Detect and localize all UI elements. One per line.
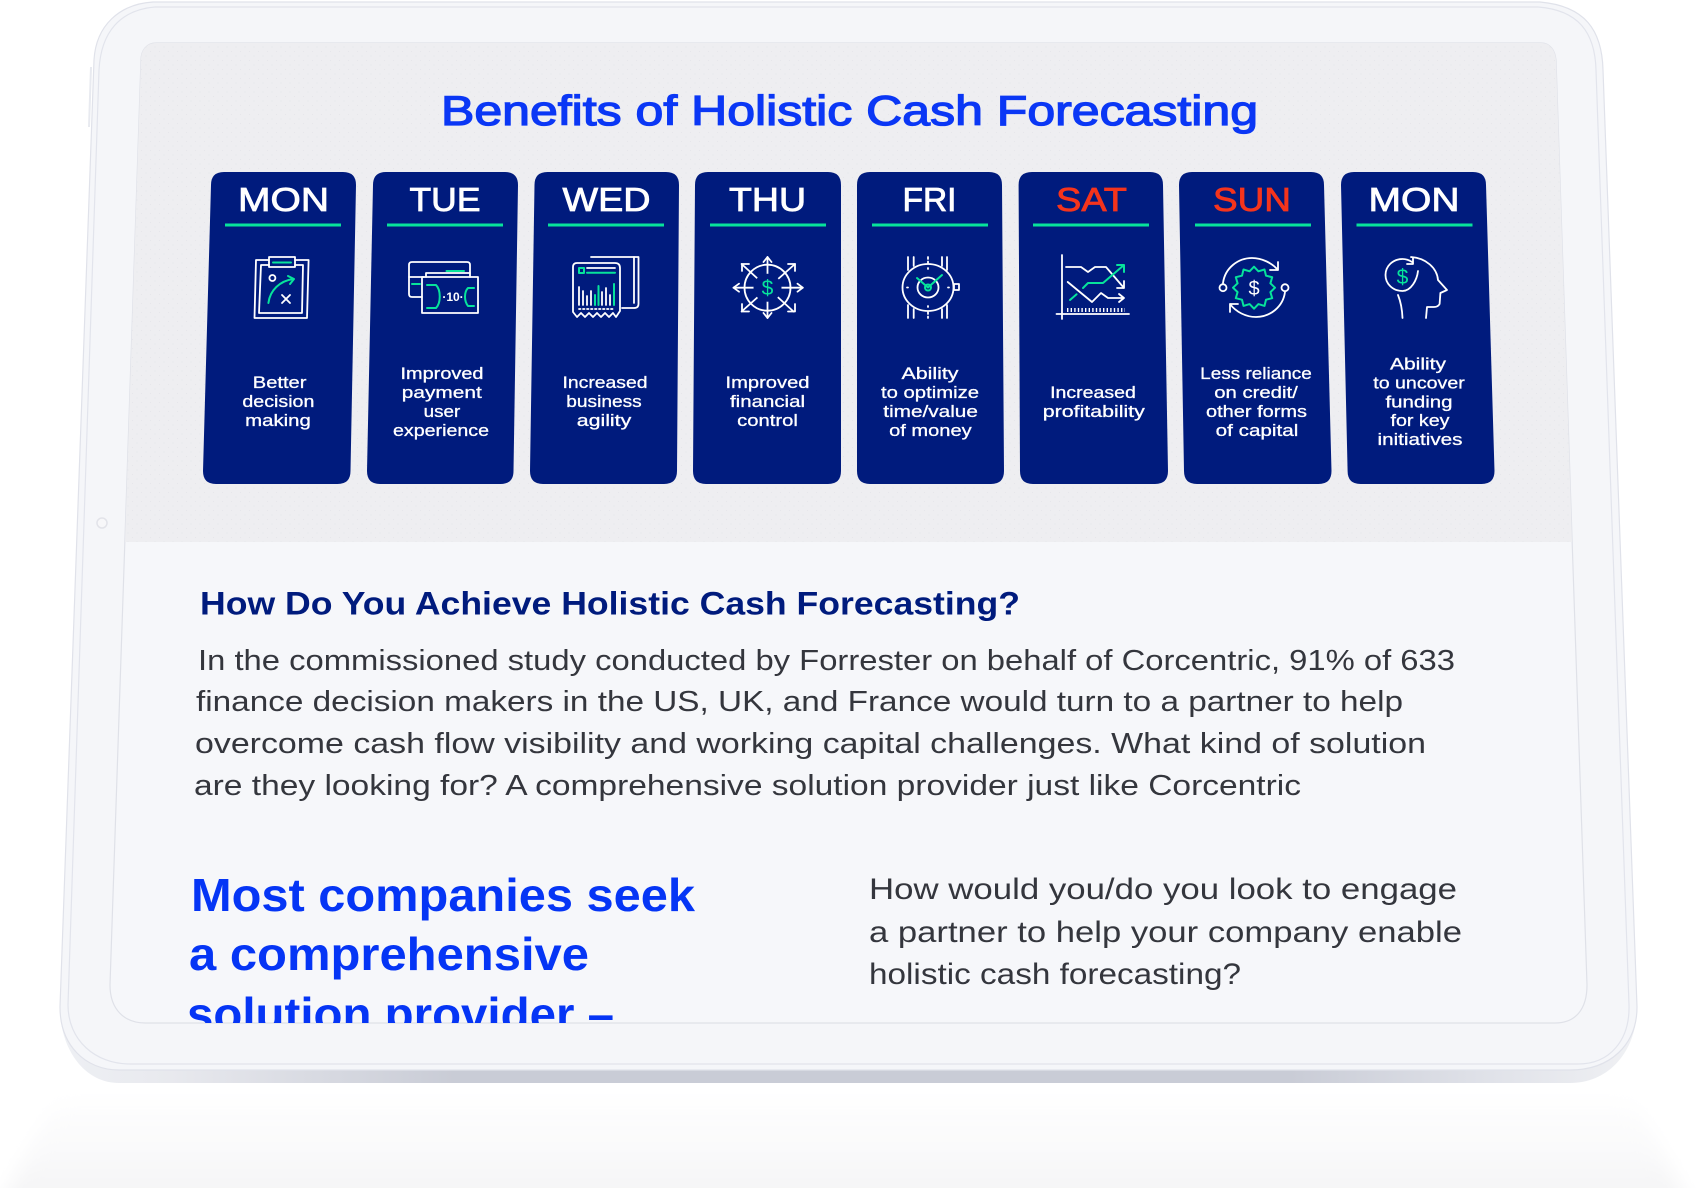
- description: business: [566, 392, 642, 411]
- icon: head with dollar: $: [1397, 266, 1409, 289]
- body paragraph: are they looking for? A comprehensive solution provider just like Corcentric: [194, 770, 1301, 802]
- description: Increased: [562, 373, 648, 392]
- survey question: [869, 873, 1462, 991]
- card: Wednesday, increased business agility: [530, 172, 679, 484]
- description: Increased: [1050, 383, 1136, 402]
- day label: TUE: [410, 181, 480, 218]
- icon: payment cards with banknote: [409, 262, 478, 313]
- description: profitability: [1043, 402, 1145, 421]
- description: payment: [402, 383, 482, 402]
- body paragraph: finance decision makers in the US, UK, and France would turn to a partner to help: [196, 686, 1403, 718]
- icon: dollar with radiating arrows: $: [762, 277, 774, 300]
- description: on credit/: [1214, 383, 1298, 402]
- description: of capital: [1216, 421, 1298, 440]
- card: Thursday, improved financial control: [693, 172, 841, 484]
- day label: MON: [238, 181, 329, 218]
- description: agility: [577, 411, 632, 430]
- card: Friday, optimize time/value of money: [857, 172, 1004, 484]
- description: [1373, 354, 1465, 449]
- description: decision: [242, 392, 314, 411]
- survey question: holistic cash forecasting?: [869, 958, 1241, 991]
- day label: SUN: [1213, 181, 1291, 218]
- description: of money: [889, 421, 972, 440]
- description: financial: [730, 392, 805, 411]
- icon: financial report receipt: [573, 257, 638, 317]
- description: [562, 373, 648, 430]
- callout: most companies seek a comprehensive solution provider: [190, 878, 695, 1023]
- rule: [1356, 224, 1472, 226]
- rule: [1033, 224, 1149, 226]
- icon: payment cards with banknote: ·10·: [442, 290, 464, 304]
- icon: circular dollar gear: [1220, 258, 1288, 317]
- rule: [1195, 224, 1311, 226]
- description: [393, 364, 489, 440]
- description: [1043, 383, 1145, 421]
- rule: [548, 224, 664, 226]
- icon: dollar with radiating arrows: [734, 257, 803, 318]
- side button: [89, 67, 91, 127]
- title: Benefits of Holistic Cash Forecasting: [441, 87, 1258, 134]
- description: user: [424, 402, 461, 421]
- description: for key: [1390, 411, 1450, 430]
- callout: most companies seek a comprehensive solution provider: Most companies seek: [191, 869, 695, 921]
- description: [726, 373, 810, 430]
- camera: [97, 518, 107, 528]
- description: Ability: [902, 364, 959, 383]
- icon: wristwatch: [902, 257, 959, 318]
- description: [881, 364, 979, 440]
- day label: FRI: [902, 181, 956, 218]
- body paragraph: [194, 645, 1455, 802]
- description: making: [245, 411, 311, 430]
- icon: head with dollar: [1386, 257, 1447, 318]
- description: Ability: [1390, 354, 1447, 374]
- description: Improved: [400, 364, 484, 383]
- icon: profit line chart: [1056, 255, 1129, 319]
- description: Improved: [726, 373, 810, 392]
- screen lower background: [110, 43, 1587, 1023]
- description: Less reliance: [1200, 364, 1312, 383]
- description: initiatives: [1378, 430, 1462, 449]
- rule: [387, 224, 503, 226]
- icon: clipboard play: [254, 257, 309, 318]
- description: Better: [253, 373, 307, 392]
- icon: circular dollar gear: $: [1248, 278, 1260, 300]
- description: other forms: [1206, 402, 1307, 421]
- description: to optimize: [881, 383, 979, 402]
- description: time/value: [883, 402, 978, 421]
- day label: MON: [1368, 181, 1460, 218]
- ground shadow: [21, 1176, 1669, 1188]
- rule: [872, 224, 988, 226]
- description: [1200, 364, 1312, 440]
- description: experience: [393, 421, 489, 440]
- card: Sunday, less reliance on credit: [1179, 172, 1332, 484]
- description: to uncover: [1373, 374, 1465, 392]
- screen: [110, 43, 1587, 1023]
- body paragraph: overcome cash flow visibility and working capital challenges. What kind of solution: [195, 728, 1426, 760]
- callout: most companies seek a comprehensive solution provider: a comprehensive: [189, 928, 589, 980]
- survey question: How would you/do you look to engage: [869, 873, 1457, 906]
- day label: WED: [562, 181, 650, 218]
- callout: most companies seek a comprehensive solution provider: solution provider –: [187, 988, 614, 1040]
- day label: THU: [729, 181, 806, 218]
- body paragraph: In the commissioned study conducted by Forrester on behalf of Corcentric, 91% of 633: [198, 645, 1455, 677]
- screen upper grey panel: [125, 43, 1572, 542]
- survey question: a partner to help your company enable: [869, 916, 1462, 949]
- description: control: [737, 411, 798, 430]
- card: Monday, uncover funding: [1341, 172, 1494, 484]
- card: Saturday, increased profitability: [1019, 172, 1168, 484]
- description: funding: [1386, 392, 1452, 412]
- rule: [710, 224, 826, 226]
- rule: [225, 224, 341, 226]
- card: Monday, better decision making: [203, 172, 356, 484]
- section heading: How Do You Achieve Holistic Cash Forecasting?: [200, 585, 1020, 621]
- day label: SAT: [1056, 181, 1127, 218]
- card: Tuesday, improved payment user experience: [367, 172, 518, 484]
- description: [242, 373, 314, 430]
